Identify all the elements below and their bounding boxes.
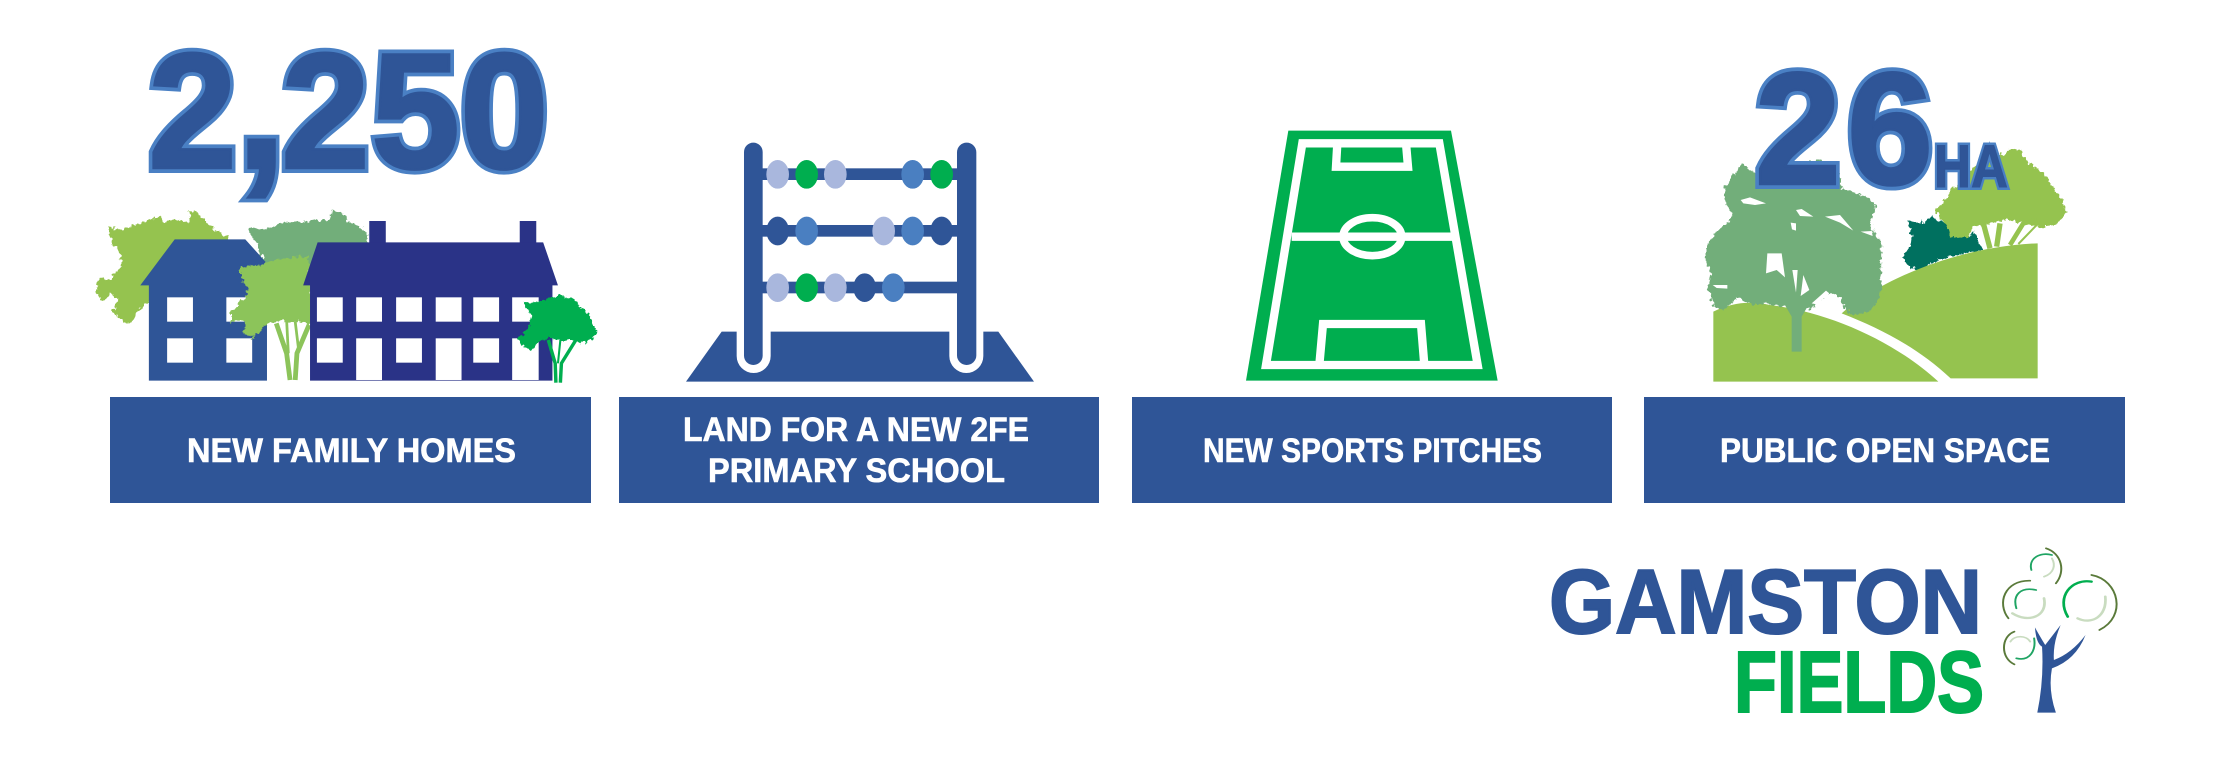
big number: 2,250: , bbox=[236, 0, 287, 209]
tree: green middle bbox=[232, 257, 312, 380]
big number: 2,250: 2 bbox=[148, 20, 237, 204]
label bar: new family homes bbox=[110, 397, 591, 503]
big number: 2,250: 5 bbox=[371, 20, 460, 204]
unit: HA: HA bbox=[1934, 133, 2008, 200]
panel: new family homes bbox=[95, 0, 598, 503]
label bar: land for a new 2FE primary school bbox=[619, 397, 1099, 503]
label bar: new sports pitches: NEW SPORTS PITCHES bbox=[1203, 432, 1542, 470]
big number: 26: 6 bbox=[1847, 40, 1933, 219]
big number: 2,250: 2 bbox=[148, 20, 237, 204]
label bar: land for a new 2FE primary school: PRIMARY SCHOOL bbox=[708, 452, 1005, 490]
tree: large sage bbox=[1703, 160, 1882, 352]
tree: bright green right bbox=[517, 295, 598, 383]
big number: 26: 2 bbox=[1755, 40, 1841, 219]
panel: public open space bbox=[1644, 40, 2125, 503]
big number: 2,250: 5 bbox=[371, 20, 460, 204]
label bar: public open space: PUBLIC OPEN SPACE bbox=[1720, 432, 2050, 470]
label bar: public open space bbox=[1644, 397, 2125, 503]
big number: 2,250: 2 bbox=[281, 20, 370, 204]
big number: 2,250 bbox=[148, 0, 549, 209]
tree: dark teal bbox=[1902, 217, 1983, 270]
label bar: new family homes: NEW FAMILY HOMES bbox=[187, 432, 516, 470]
big number: 2,250: , bbox=[236, 0, 287, 209]
logo: Gamston Fields bbox=[1549, 548, 2117, 731]
panel: sports pitches bbox=[1132, 131, 1612, 503]
label bar: land for a new 2FE primary school: LAND FOR A NEW 2FE bbox=[683, 411, 1029, 449]
big number: 26 bbox=[1755, 40, 1933, 219]
wordmark: FIELDS: FIELDS bbox=[1734, 634, 1984, 731]
house: large navy bbox=[303, 221, 558, 381]
house: small blue bbox=[140, 239, 287, 381]
panel: primary school bbox=[619, 143, 1099, 503]
tree: pale green on hill bbox=[1935, 148, 2067, 248]
big number: 2,250: 0 bbox=[460, 20, 549, 204]
icon: abacus bbox=[686, 143, 1034, 382]
label bar: new sports pitches bbox=[1132, 397, 1612, 503]
tree: light green left bbox=[95, 211, 228, 323]
big number: 2,250: 2 bbox=[281, 20, 370, 204]
icon: landscape with trees bbox=[1703, 148, 2067, 382]
hills bbox=[1713, 243, 2038, 382]
wordmark: GAMSTON: GAMSTON bbox=[1549, 552, 1982, 653]
tree: sage green behind bbox=[249, 210, 369, 267]
unit: HA: HA bbox=[1934, 133, 2008, 200]
big number: 26: 6 bbox=[1847, 40, 1933, 219]
icon: houses and trees bbox=[95, 210, 598, 383]
icon: football pitch bbox=[1246, 131, 1498, 381]
big number: 2,250: 0 bbox=[460, 20, 549, 204]
big number: 26: 2 bbox=[1755, 40, 1841, 219]
icon: logo tree bbox=[2003, 548, 2117, 713]
